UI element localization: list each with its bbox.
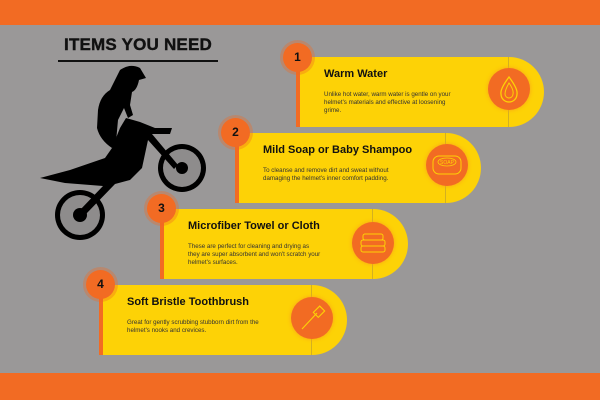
card 3: These are perfect for cleaning and drying as they are super absorbent and won't scratch your helmet's surfaces. <box>188 243 320 266</box>
badge 1: 1 <box>294 50 301 64</box>
badge 3 <box>147 194 176 223</box>
badge 4: 4 <box>97 277 104 291</box>
card 3: Microfiber Towel or Cloth <box>188 220 320 232</box>
card 2: To cleanse and remove dirt and sweat without damaging the helmet's inner comfort padding. <box>263 167 389 182</box>
card 4: Soft Bristle Toothbrush <box>127 296 249 308</box>
title: ITEMS YOU NEED <box>64 35 212 54</box>
badge 1 <box>283 43 312 72</box>
card 1: Warm Water <box>324 68 387 80</box>
title <box>58 35 218 62</box>
card 4: Great for gently scrubbing stubborn dirt from the helmet's nooks and crevices. <box>127 319 259 334</box>
icon: water drop <box>488 68 530 110</box>
motorcycle silhouette <box>40 66 206 240</box>
card 2 <box>235 133 481 203</box>
bottom bar <box>0 373 600 400</box>
icon: soap <box>426 144 468 186</box>
card 1: Unlike hot water, warm water is gentle on your helmet's materials and effective at loosening grime. <box>324 91 451 114</box>
badge 2 <box>221 118 250 147</box>
card 4 <box>99 285 347 355</box>
card 1 <box>296 57 544 127</box>
badge 3: 3 <box>158 201 165 215</box>
badge 4 <box>86 270 115 299</box>
icon: towels <box>352 222 394 264</box>
icon: toothbrush <box>291 297 333 339</box>
badge 2: 2 <box>232 125 239 139</box>
icon: soap: SOAP <box>440 160 455 166</box>
card 2: Mild Soap or Baby Shampoo <box>263 144 412 156</box>
top bar <box>0 0 600 25</box>
card 3 <box>160 209 408 279</box>
